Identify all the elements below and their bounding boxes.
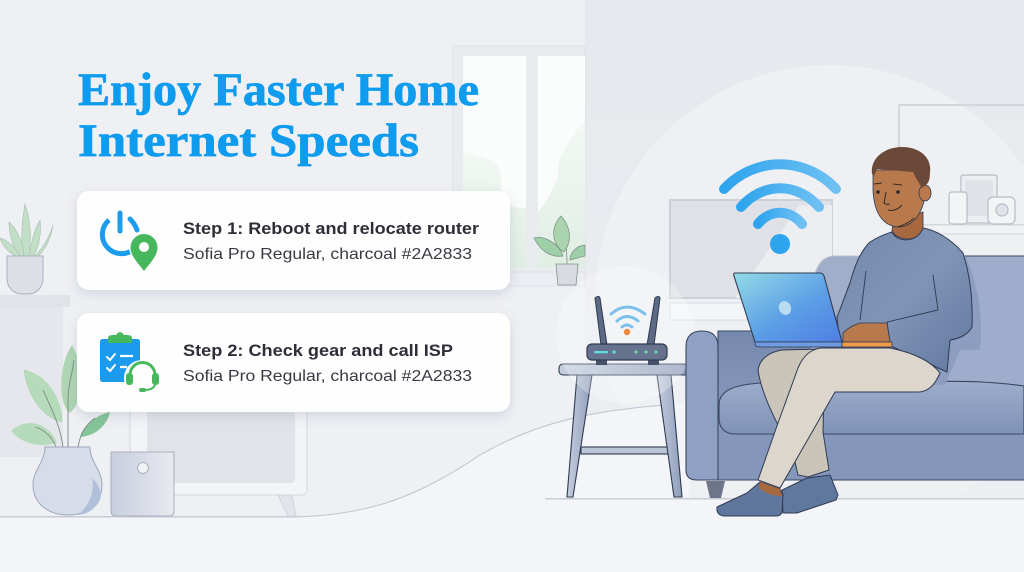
laptop [734,273,892,347]
speaker box [111,452,174,516]
icon: windowsill plant [534,216,585,285]
panel: step 1 card [77,191,510,290]
face [873,170,925,227]
neck [892,212,923,239]
icon: checklist and headset [100,332,160,396]
step 2 text: Step 2: Check gear and call ISP [183,341,453,360]
hair [872,147,930,188]
ear [919,185,931,201]
sofa base [700,430,1024,480]
icon: router wifi signal [611,307,645,335]
seat cushion [719,381,1024,434]
panel: step 2 card: Sofia Pro Regular, charcoal #2A2833 [183,368,472,385]
side table [559,364,689,497]
sofa leg [706,481,725,498]
ankle [759,482,782,496]
sofa arm [686,331,718,480]
router with antennas [587,296,667,365]
sleeve detail [860,271,938,342]
title: Internet Speeds [78,115,419,167]
near shoe [717,482,783,516]
sofa [686,256,1024,498]
icon: power and location pin [102,213,159,271]
title: Enjoy Faster Home [78,64,479,116]
window with view [453,46,585,286]
far shoe [782,475,838,513]
panel: step 1 card: Sofia Pro Regular, charcoal #2A2833 [183,246,472,263]
title [78,64,479,167]
facial features [876,190,880,194]
person shadow on sofa [900,255,981,385]
vase [33,447,102,515]
torso and sleeve [837,228,972,372]
near leg [758,348,940,488]
TV and bench behind sofa [670,200,832,320]
person on sofa [717,147,981,516]
far leg [758,349,829,477]
icon: large wifi symbol [724,164,836,254]
media console [130,400,307,516]
wall picture and shelf [899,105,1024,234]
icon: devices on shelf [949,175,1015,224]
shelf with aloe plant [0,204,70,457]
router glow [556,266,694,404]
large leafy plant in vase [11,345,110,515]
step 1 text: Step 1: Reboot and relocate router [183,219,479,238]
hand on keyboard [843,323,890,342]
panel: step 2 card [77,313,510,412]
